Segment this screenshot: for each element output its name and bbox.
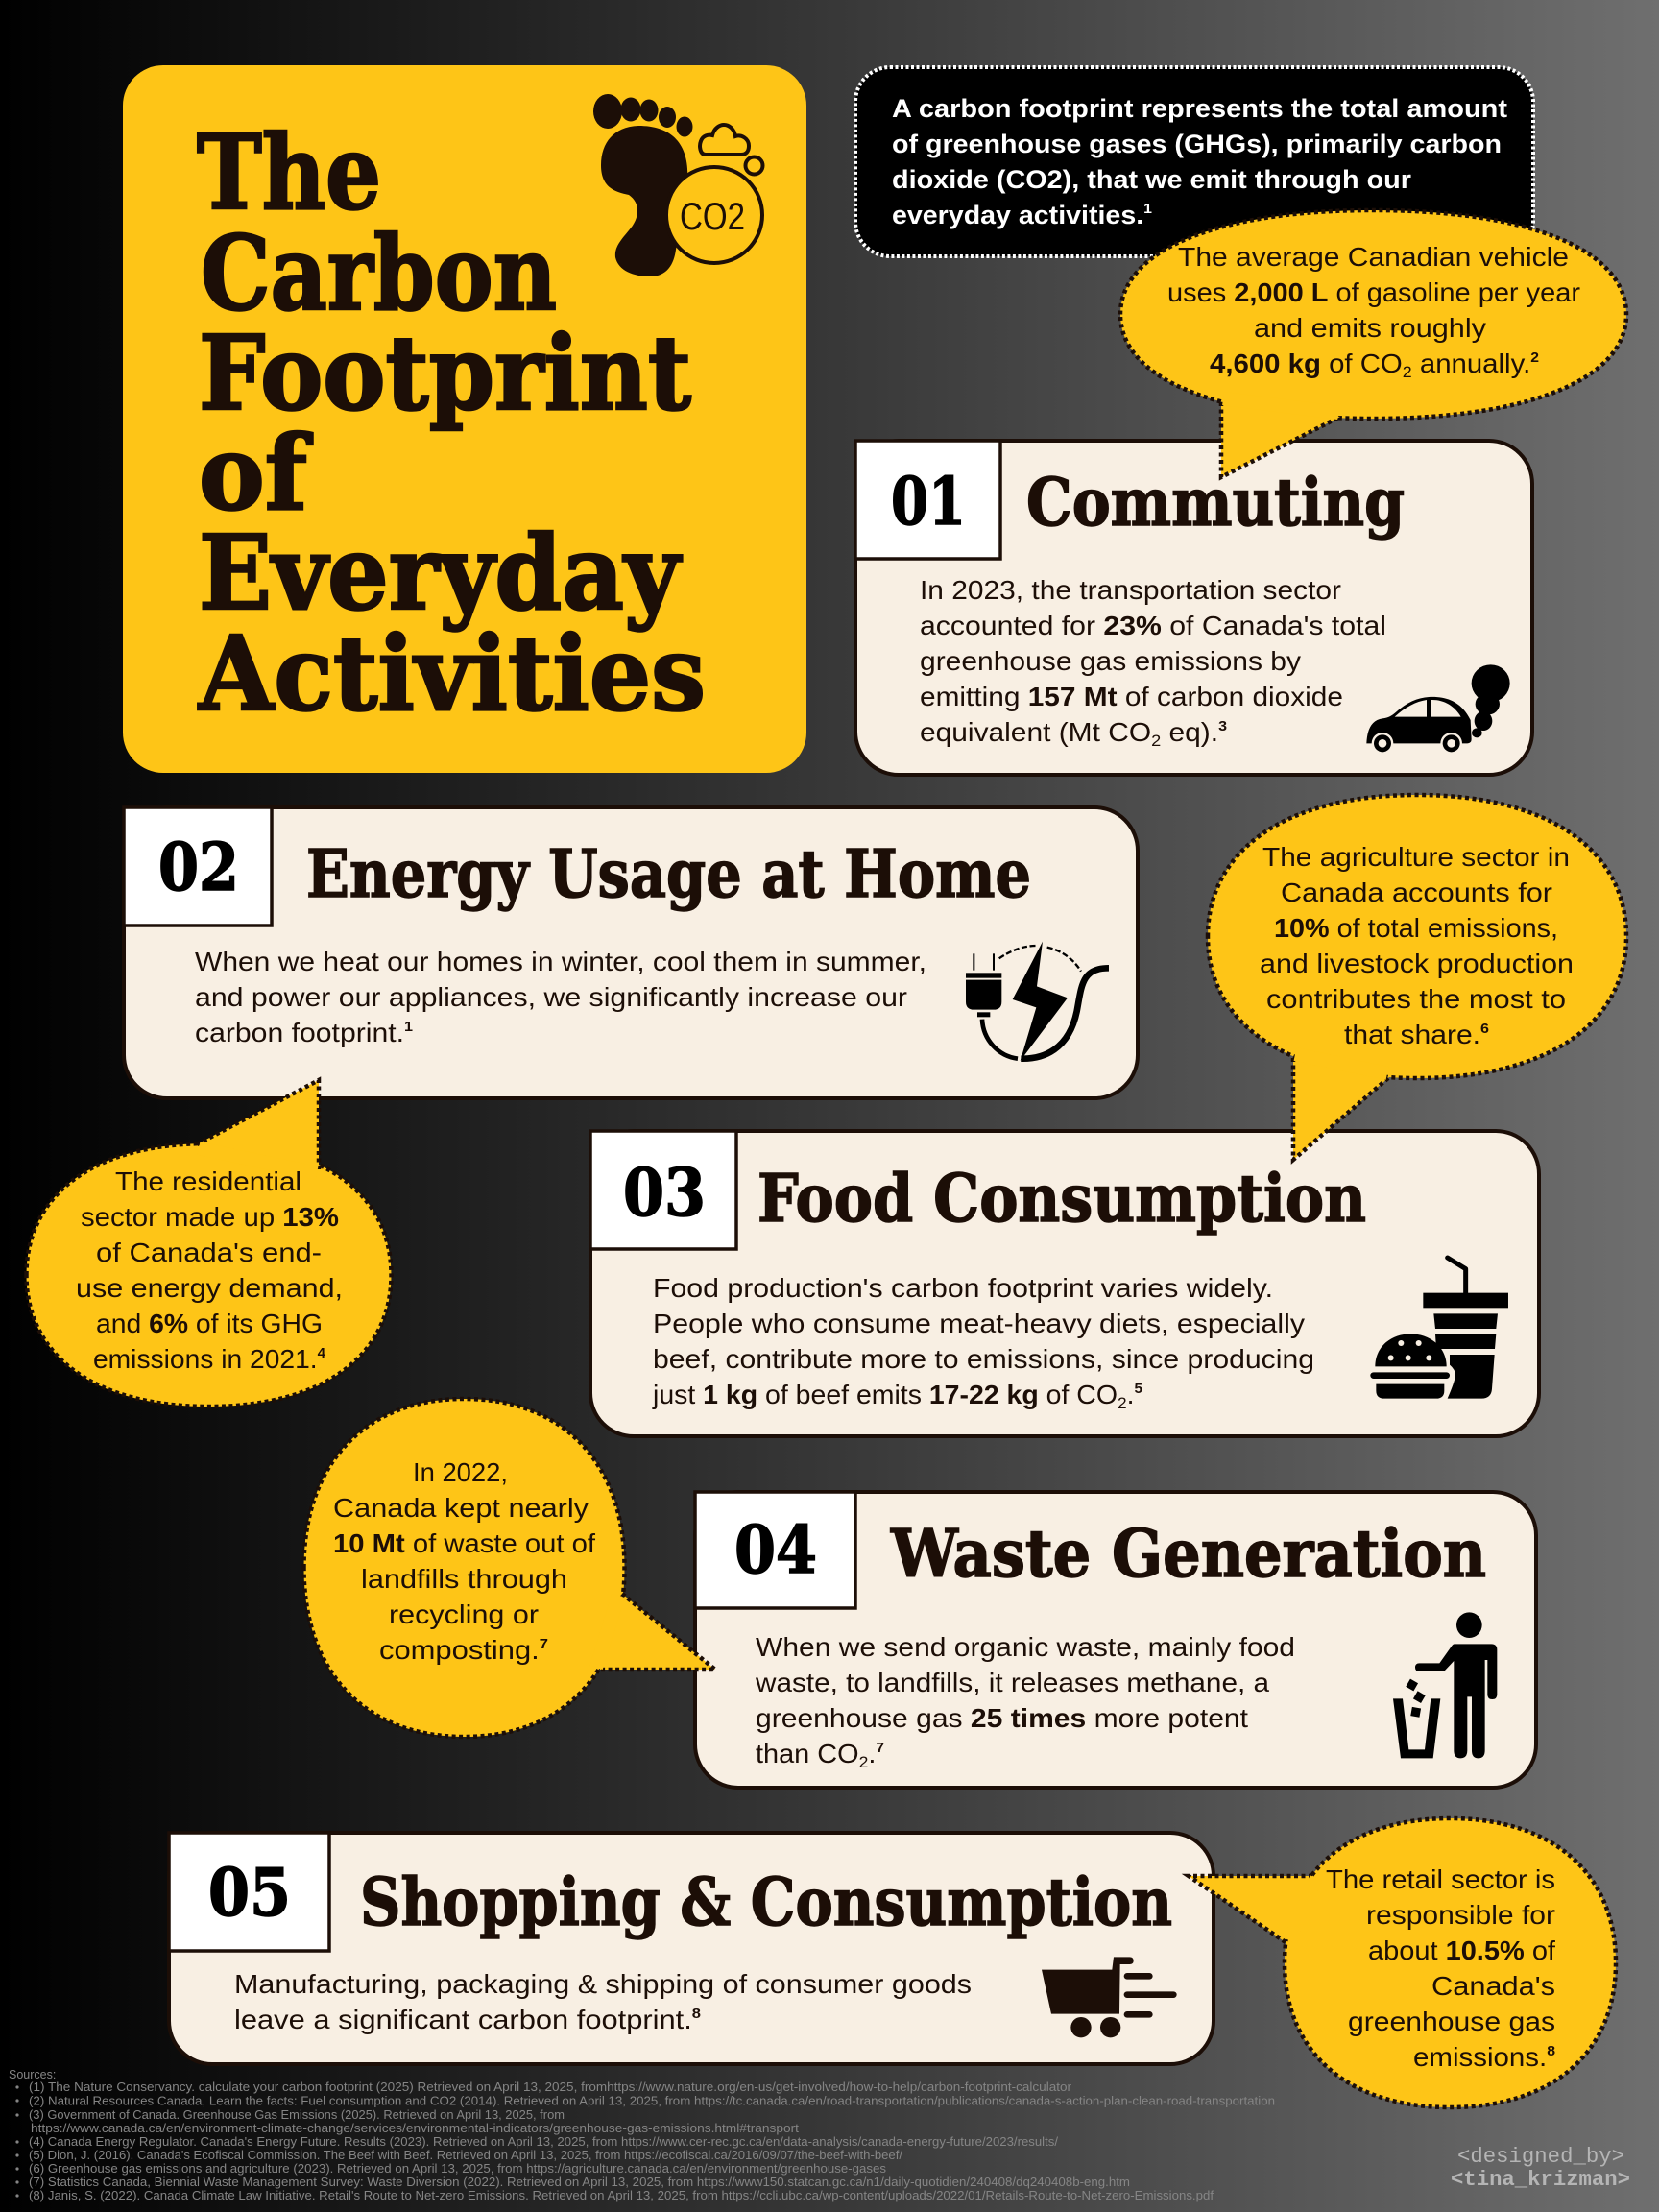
callout: retail sector: 8 (1547, 2043, 1555, 2059)
panel: 04 waste generation: . (868, 1739, 876, 1768)
panel: 03 food consumption: 5 (1135, 1381, 1142, 1397)
panel: 01 commuting: eq). (1161, 717, 1218, 747)
callout: agriculture sector: The agriculture sector in (1262, 842, 1570, 872)
panel: 03 food consumption: People who consume meat-heavy diets, especially (653, 1309, 1305, 1338)
panel: 04 waste generation: 7 (876, 1740, 884, 1756)
callout: average vehicle: The average Canadian vehicle (1178, 242, 1569, 272)
callout: retail sector: greenhouse gas (1348, 2007, 1555, 2036)
callout: average vehicle: 2 (1530, 349, 1539, 366)
panel: 01 commuting: emitting 157 Mt of carbon dioxide (920, 682, 1343, 711)
panel: 01 commuting: equivalent (Mt CO (920, 717, 1137, 747)
title: Activities (198, 614, 706, 734)
panel: intro definition: of greenhouse gases (GHGs), primarily carbon (892, 130, 1502, 158)
panel: 05 shopping and consumption: 05 (208, 1855, 291, 1932)
panel: 04 waste generation: than CO (756, 1739, 855, 1768)
panel: 03 food consumption: beef, contribute more to emissions, since producing (653, 1344, 1314, 1374)
sources list: (4) Canada Energy Regulator. Canada's Energy Future. Results (2023). Retrieved on April 13, 2025, from https://www.cer-rec.gc.ca/en/data-analysis/canada-energy-future/2023/results/ (29, 2135, 1059, 2149)
panel: 02 energy usage: 02 (158, 830, 239, 906)
icon: footprint with CO2 (593, 94, 762, 276)
callout: residential sector (27, 1080, 392, 1407)
callout: retail sector (1189, 1818, 1616, 2107)
panel: 01 commuting: In 2023, the transportation sector (920, 575, 1341, 605)
panel: 03 food consumption: just 1 kg of beef emits 17-22 kg of CO (653, 1380, 1117, 1409)
icon: person using trash bin (1393, 1612, 1497, 1758)
panel: 02 energy usage: When we heat our homes in winter, cool them in summer, (195, 947, 926, 976)
callout: agriculture sector: Canada accounts for (1281, 878, 1552, 907)
designer credit: <designed_by> (1457, 2145, 1624, 2169)
sources list: (2) Natural Resources Canada, Learn the facts: Fuel consumption and CO2 (2014). Retrieved on April 13, 2025, from https://tc.canada.ca/en/road-transportation/publications/canada-s-action-plan-clean-road-transportation (29, 2095, 1275, 2108)
callout: residential sector: The residential (115, 1166, 301, 1196)
panel: 02 energy usage: and power our appliances, we significantly increase our (195, 982, 907, 1012)
title: The (197, 113, 381, 233)
callout: retail sector: about 10.5% of (1368, 1936, 1555, 1965)
panel: 05 shopping and consumption: leave a significant carbon footprint. (234, 2005, 650, 2034)
panel: 04 waste generation: waste, to landfills, it releases methane, a (755, 1668, 1269, 1697)
panel: intro definition: everyday activities. (892, 201, 1130, 229)
callout: average vehicle: annually. (1412, 349, 1530, 378)
sources list: (7) Statistics Canada, Biennial Waste Management Survey: Waste Diversion (2022). Retrieved on April 13, 2025, from https://www150.statcan.gc.ca/n1/daily-quotidien/240408/dq240408b-eng.htm (29, 2176, 1130, 2189)
sources list: Sources: (9, 2068, 56, 2081)
panel: 02 energy usage: carbon footprint. (195, 1018, 389, 1047)
panel: 05 shopping and consumption: 8 (692, 2006, 701, 2022)
panel: 04 waste generation: Waste Generation (890, 1516, 1486, 1593)
designer credit (1451, 2145, 1630, 2192)
sources list: (1) The Nature Conservancy. calculate your carbon footprint (2025) Retrieved on April 13, 2025, fromhttps://www.nature.org/en-us/get-involved/how-to-help/carbon-footprint-calculator (29, 2080, 1071, 2094)
sources list (9, 2068, 1275, 2202)
panel: intro definition: dioxide (CO2), that we emit through our (892, 165, 1412, 194)
panel: 01 commuting: 3 (1218, 718, 1227, 734)
panel: 03 food consumption: Food Consumption (757, 1161, 1366, 1238)
panel: 04 waste generation (695, 1492, 1536, 1788)
panel: intro definition: 1 (1143, 201, 1152, 217)
callout: waste diversion (303, 1399, 715, 1737)
callout: average vehicle (1120, 210, 1626, 477)
callout: agriculture sector: that share. (1344, 1020, 1471, 1049)
callout: retail sector: responsible for (1366, 1900, 1555, 1930)
title: of (199, 414, 313, 534)
title: Footprint (199, 314, 691, 434)
panel: 05 shopping and consumption: Shopping & Consumption (360, 1864, 1172, 1941)
panel: 03 food consumption: 2 (1118, 1394, 1127, 1412)
title (197, 113, 706, 734)
panel: title (123, 65, 806, 773)
callout: waste diversion: 10 Mt of waste out of (333, 1528, 595, 1558)
panel: 02 energy usage: 1 (404, 1019, 413, 1035)
callout: waste diversion: Canada kept nearly (333, 1493, 589, 1523)
panel: 02 energy usage: Energy Usage at Home (306, 836, 1031, 913)
callout: residential sector: use energy demand, (76, 1273, 343, 1303)
designer credit: <tina_krizman> (1451, 2168, 1630, 2192)
icon: shopping cart (1042, 1957, 1177, 2037)
callout: residential sector: 4 (318, 1345, 326, 1361)
callout: average vehicle: 2 (1403, 363, 1412, 381)
icon: burger and drink (1370, 1258, 1508, 1399)
icon: car with exhaust (1366, 664, 1510, 755)
panel: 01 commuting (855, 441, 1532, 775)
callout: waste diversion: In 2022, (413, 1457, 508, 1487)
panel: 04 waste generation: greenhouse gas 25 times more potent (756, 1703, 1248, 1733)
panel: 04 waste generation: 2 (859, 1753, 868, 1771)
title: Everyday (199, 514, 683, 634)
callout: average vehicle: uses 2,000 L of gasoline per year (1167, 277, 1580, 307)
icon: plug and lightning bolt (966, 942, 1109, 1061)
callout: agriculture sector (1208, 795, 1626, 1160)
panel: 05 shopping and consumption (169, 1833, 1214, 2064)
sources list: (5) Dion, J. (2016). Canada's Ecofiscal Commission. The Beef with Beef. Retrieved on April 13, 2025, from https://ecofiscal.ca/2016/09/07/the-beef-with-beef/ (29, 2149, 903, 2162)
callout: waste diversion: recycling or (389, 1599, 539, 1629)
callout: residential sector: of Canada's end- (96, 1238, 322, 1267)
sources list: (8) Janis, S. (2022). Canada Climate Law Initiative. Retail's Route to Net-zero Emissions. Retrieved on April 13, 2025, from https://ccli.ubc.ca/wp-content/uploads/2022/01/Retails-Route-to-Net-zero-Emissions.pdf (29, 2189, 1214, 2202)
panel: 05 shopping and consumption: Manufacturing, packaging & shipping of consumer goods (234, 1969, 972, 1999)
panel: intro definition: A carbon footprint represents the total amount (892, 94, 1507, 123)
callout: agriculture sector: 10% of total emissions, (1274, 913, 1558, 943)
callout: waste diversion: composting. (379, 1635, 524, 1665)
callout: average vehicle: 4,600 kg of CO (1210, 349, 1399, 378)
callout: agriculture sector: contributes the most to (1266, 984, 1566, 1014)
callout: retail sector: emissions. (1413, 2042, 1540, 2072)
panel: 01 commuting: 2 (1151, 732, 1161, 750)
panel: 01 commuting: Commuting (1026, 465, 1405, 541)
callout: residential sector: emissions in 2021. (93, 1344, 316, 1374)
sources list: https://www.canada.ca/en/environment-climate-change/services/environmental-indicators/greenhouse-gas-emissions.html#transport (31, 2122, 800, 2135)
panel: 02 energy usage (124, 807, 1138, 1098)
panel: 01 commuting: greenhouse gas emissions by (920, 646, 1301, 676)
callout: residential sector: and 6% of its GHG (96, 1309, 323, 1338)
panel: 01 commuting: accounted for 23% of Canada's total (920, 611, 1386, 640)
panel: 04 waste generation: When we send organic waste, mainly food (756, 1632, 1295, 1662)
sources list: (6) Greenhouse gas emissions and agriculture (2023). Retrieved on April 13, 2025, from https://agriculture.canada.ca/en/environment/greenhouse-gases (29, 2162, 886, 2176)
callout: agriculture sector: and livestock production (1260, 949, 1574, 978)
sources list: (3) Government of Canada. Greenhouse Gas Emissions (2025). Retrieved on April 13, 2025, from (29, 2108, 565, 2122)
panel: 04 waste generation: 04 (734, 1512, 817, 1589)
panel: 03 food consumption: Food production's carbon footprint varies widely. (653, 1273, 1273, 1303)
callout: agriculture sector: 6 (1480, 1021, 1489, 1037)
callout: retail sector: Canada's (1431, 1971, 1555, 2001)
title: Carbon (201, 214, 557, 334)
callout: retail sector: The retail sector is (1326, 1864, 1555, 1894)
icon: footprint with CO2: CO2 (680, 196, 745, 238)
callout: average vehicle: and emits roughly (1254, 313, 1486, 343)
panel: 03 food consumption: 03 (623, 1155, 706, 1232)
callout: residential sector: sector made up 13% (81, 1202, 339, 1232)
panel: 03 food consumption: . (1127, 1380, 1135, 1409)
callout: waste diversion: 7 (540, 1636, 548, 1652)
panel: 01 commuting: 01 (891, 464, 966, 541)
panel: 03 food consumption (590, 1131, 1539, 1436)
callout: waste diversion: landfills through (361, 1564, 567, 1594)
panel: intro definition (855, 67, 1533, 256)
